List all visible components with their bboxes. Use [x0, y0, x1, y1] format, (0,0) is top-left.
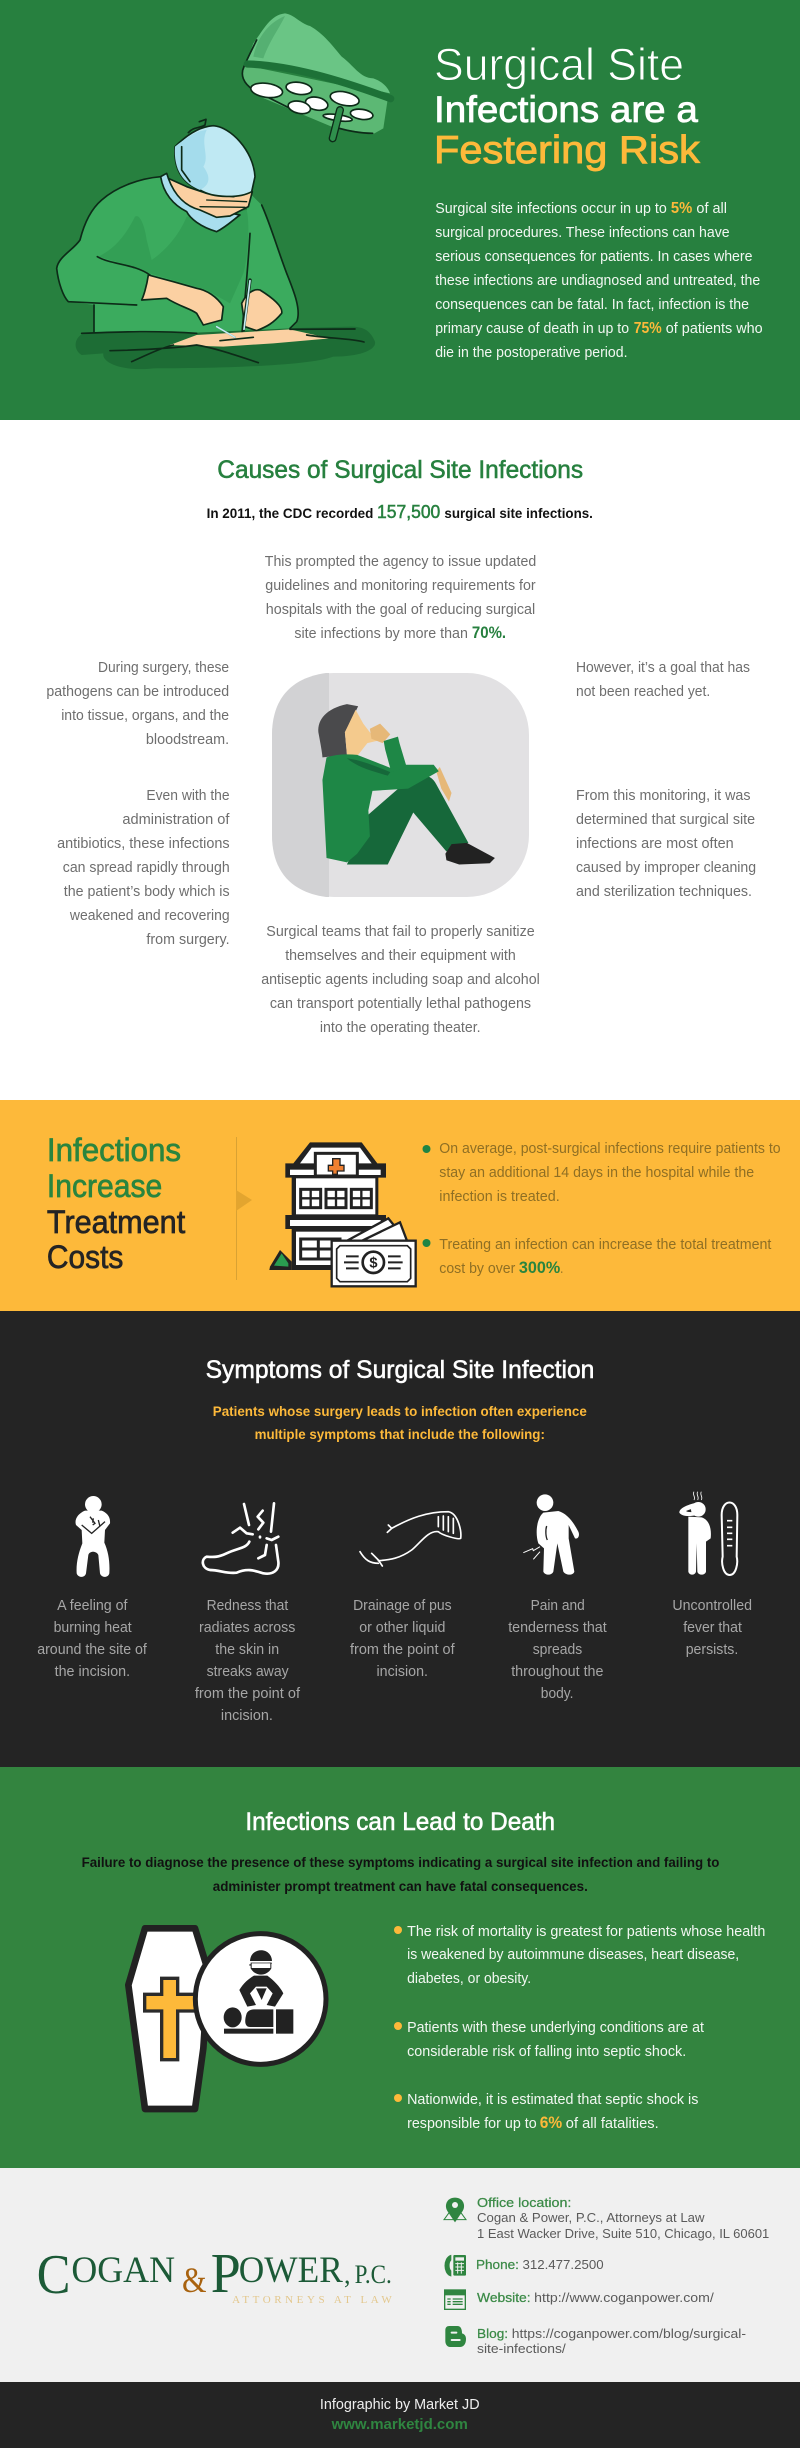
text block: goal not reached: not been reached yet. [576, 684, 710, 700]
contact: phone: Phone: [476, 2257, 519, 2272]
heading: treatment costs: Infections [47, 1132, 181, 1168]
label: pain: throughout the [511, 1664, 604, 1680]
text block: antibiotics: weakened and recovering [69, 908, 230, 924]
illustration: surgeon and operating lamp [57, 13, 391, 369]
label: drainage [350, 1598, 456, 1680]
text block: pathogens introduced: During surgery, these [98, 660, 229, 676]
text block: monitoring findings [576, 788, 756, 900]
text block: CDC guidelines [265, 554, 536, 642]
bullet: fatalities: 6% [540, 2113, 562, 2132]
bullet: risk of mortality [394, 1924, 765, 1987]
statistic: 157,500 infections: 157,500 [377, 502, 440, 522]
text block: goal not reached: However, it’s a goal that has [576, 660, 750, 676]
text block: hero introduction: consequences can be fatal. In fact, infection is the [435, 297, 749, 313]
bullet: risk of mortality: The risk of mortality is greatest for patients whose health [407, 1924, 765, 1940]
contact: phone [445, 2255, 604, 2276]
logo: Cogan & Power: ATTORNEYS AT LAW [232, 2294, 392, 2306]
logo: Cogan & Power [37, 2243, 392, 2306]
text block: hero introduction: of patients who [666, 321, 763, 337]
label: drainage: or other liquid [359, 1620, 445, 1636]
contact: blog: site-infections/ [477, 2341, 566, 2356]
label: fever [672, 1598, 752, 1658]
text block: monitoring findings: infections are most often [576, 836, 734, 852]
contact: blog [445, 2326, 746, 2356]
bullet: hospital stay: infection is treated. [439, 1189, 560, 1205]
text block: surgical teams: antiseptic agents including soap and alcohol [261, 972, 540, 988]
statistic: 157,500 infections [207, 502, 593, 522]
text block: hero introduction: Surgical site infections occur in up to [435, 201, 667, 217]
text block: CDC guidelines: guidelines and monitoring requirements for [265, 578, 536, 594]
label: fever: persists. [686, 1642, 738, 1658]
label: redness: Redness that [207, 1598, 288, 1614]
heading: symptoms: Symptoms of Surgical Site Infection [206, 1356, 594, 1384]
bullet: septic shock risk: considerable risk of falling into septic shock. [407, 2044, 686, 2060]
label: redness: the skin in [215, 1642, 279, 1658]
bullet: septic shock risk [394, 2020, 704, 2060]
icon: hospital and money [269, 1142, 416, 1286]
text block: hero introduction: 75% [634, 320, 662, 337]
bullet: hospital stay: stay an additional 14 days in the hospital while the [439, 1165, 754, 1181]
contact: office location: Office location: [477, 2195, 571, 2210]
text block: pathogens introduced: bloodstream. [146, 732, 229, 748]
bullet: treatment cost: cost by over [439, 1261, 515, 1277]
contact: office location: Cogan & Power, P.C., Attorneys at Law [477, 2210, 705, 2225]
label: pain: body. [541, 1686, 574, 1702]
icon: foot with redness [203, 1503, 278, 1574]
label: pain: tenderness that [508, 1620, 607, 1636]
contact: website: http://www.coganpower.com/ [534, 2290, 714, 2305]
label: redness: radiates across [199, 1620, 295, 1636]
text block: surgical teams: themselves and their equipment with [285, 948, 516, 964]
label: redness: incision. [221, 1708, 273, 1724]
label: drainage: from the point of [350, 1642, 456, 1658]
bullet: treatment cost: 300% [519, 1258, 560, 1277]
illustration: patient sitting against wall [272, 673, 529, 897]
bullet: fatalities: Nationwide, it is estimated that septic shock is [407, 2092, 698, 2108]
bullet: hospital stay [422, 1141, 781, 1205]
arrow: pointer to hospital [236, 1190, 252, 1211]
text block: hero introduction: die in the postoperative period. [435, 345, 628, 361]
text block: surgical teams: Surgical teams that fail to properly sanitize [266, 924, 535, 940]
statistic: 157,500 infections: In 2011, the CDC recorded [207, 505, 373, 521]
bullet: septic shock risk: Patients with these underlying conditions are at [407, 2020, 704, 2036]
text block: antibiotics: the patient’s body which is [64, 884, 230, 900]
contact: office location: 1 East Wacker Drive, Suite 510, Chicago, IL 60601 [477, 2226, 769, 2241]
icon: coffin and CPR [128, 1928, 326, 2109]
label: burning heat: A feeling of [57, 1598, 128, 1614]
panel: death [0, 1767, 800, 2168]
text block: surgical teams [261, 924, 540, 1036]
text block: antibiotics: Even with the [146, 788, 230, 804]
text block: hero introduction: primary cause of death in up to [435, 321, 629, 337]
logo: Cogan & Power: OGAN [71, 2250, 175, 2291]
text block: symptoms introduction: Patients whose surgery leads to infection often experience [213, 1403, 587, 1419]
credit: infographic by: Infographic by Market JD [320, 2396, 480, 2413]
text block: monitoring findings: and sterilization techniques. [576, 884, 752, 900]
logo: Cogan & Power: & [182, 2260, 206, 2300]
label: redness [195, 1598, 301, 1724]
text block: CDC guidelines: site infections by more than [294, 626, 468, 642]
text block: hero introduction: these infections are undiagnosed and untreated, the [435, 273, 760, 289]
panel: causes [0, 420, 800, 1100]
heading: causes: Causes of Surgical Site Infections [217, 456, 583, 484]
contact: blog: Blog: [477, 2326, 508, 2341]
bullet: risk of mortality: is weakened by autoimmune diseases, heart disease, [407, 1947, 739, 1963]
text block: CDC guidelines: This prompted the agency to issue updated [265, 554, 536, 570]
label: pain [508, 1598, 607, 1702]
text block: symptoms introduction: multiple symptoms that include the following: [255, 1426, 545, 1442]
logo: Cogan & Power: , [344, 2260, 350, 2289]
label: burning heat: around the site of [37, 1642, 148, 1658]
contact: office location [444, 2195, 769, 2241]
contact: phone: 312.477.2500 [522, 2257, 604, 2272]
text block: antibiotics: can spread rapidly through [63, 860, 230, 876]
logo: Cogan & Power: P.C. [355, 2260, 392, 2289]
icon: pain figure [523, 1494, 579, 1575]
label: pain: spreads [533, 1642, 582, 1658]
heading: hero title [434, 39, 700, 172]
text block: monitoring findings: caused by improper cleaning [576, 860, 756, 876]
heading: treatment costs: Treatment [47, 1204, 185, 1240]
label: redness: streaks away [207, 1664, 289, 1680]
panel: symptoms [0, 1311, 800, 1767]
heading: hero title: Infections are a [434, 89, 698, 130]
heading: hero title: Festering Risk [434, 129, 700, 172]
text block: pathogens introduced: pathogens can be introduced [46, 684, 229, 700]
bullet: treatment cost: . [560, 1261, 563, 1277]
text block: hero introduction: of all [696, 201, 727, 217]
icon: operating lamp [242, 13, 391, 138]
text block: pathogens introduced: into tissue, organs, and the [61, 708, 229, 724]
text block: hero introduction [435, 200, 763, 361]
icon: draining wound [360, 1512, 461, 1566]
text block: failure to diagnose [82, 1854, 719, 1894]
text block: hero introduction: 5% [671, 200, 692, 217]
heading: death: Infections can Lead to Death [245, 1808, 555, 1836]
contact: website: Website: [477, 2290, 531, 2305]
contact: blog: https://coganpower.com/blog/surgical- [512, 2326, 746, 2341]
text block: CDC guidelines: 70%. [472, 623, 506, 642]
text block: goal not reached [576, 660, 750, 700]
text block: symptoms introduction [213, 1403, 587, 1442]
credit: website: www.marketjd.com [331, 2416, 468, 2433]
heading: treatment costs: Increase [47, 1168, 162, 1204]
text block: antibiotics [57, 788, 230, 948]
text block: pathogens introduced [46, 660, 229, 748]
text block: failure to diagnose: Failure to diagnose the presence of these symptoms indicating a surgical site infection and failing to [82, 1854, 719, 1870]
label: burning heat: burning heat [54, 1620, 132, 1636]
logo: Cogan & Power: C [37, 2244, 70, 2306]
heading: treatment costs: Costs [47, 1239, 123, 1275]
text block: hero introduction: serious consequences for patients. In cases where [435, 249, 752, 265]
panel: contact footer [0, 2168, 800, 2382]
logo: Cogan & Power: OWER [239, 2250, 343, 2291]
icon: fever and thermometer [679, 1492, 737, 1575]
text block: antibiotics: administration of [122, 812, 230, 828]
bullet: treatment cost [422, 1237, 771, 1277]
bullet: hospital stay: On average, post-surgical infections require patients to [439, 1141, 781, 1157]
label: burning heat: the incision. [55, 1664, 130, 1680]
bullet: treatment cost: Treating an infection can increase the total treatment [439, 1237, 771, 1253]
text block: monitoring findings: determined that surgical site [576, 812, 755, 828]
text block: failure to diagnose: administer prompt treatment can have fatal consequences. [213, 1878, 588, 1894]
text block: CDC guidelines: hospitals with the goal of reducing surgical [266, 602, 535, 618]
text block: antibiotics: antibiotics, these infections [57, 836, 230, 852]
bullet: fatalities: responsible for up to [407, 2116, 537, 2132]
statistic: 157,500 infections: surgical site infections. [444, 505, 593, 521]
label: pain: Pain and [531, 1598, 585, 1614]
contact: website [445, 2290, 714, 2309]
logo: Cogan & Power: P [211, 2243, 241, 2305]
text block: surgical teams: can transport potentially lethal pathogens [270, 996, 531, 1012]
bullet: fatalities: of all fatalities. [566, 2116, 659, 2132]
label: drainage: incision. [376, 1664, 428, 1680]
panel: credit bar [0, 2382, 800, 2448]
panel: header [0, 0, 800, 420]
label: fever: fever that [683, 1620, 742, 1636]
icon: hospital and money: $ [369, 1256, 377, 1272]
label: burning heat [37, 1598, 148, 1680]
label: fever: Uncontrolled [672, 1598, 752, 1614]
text block: hero introduction: surgical procedures. These infections can have [435, 225, 730, 241]
panel: treatment costs [0, 1100, 800, 1311]
heading: treatment costs [47, 1132, 185, 1275]
label: redness: from the point of [195, 1686, 301, 1702]
label: drainage: Drainage of pus [353, 1598, 452, 1614]
bullet: fatalities [394, 2092, 698, 2132]
text block: monitoring findings: From this monitoring, it was [576, 788, 750, 804]
text block: surgical teams: into the operating theater. [320, 1020, 481, 1036]
bullet: risk of mortality: diabetes, or obesity. [407, 1971, 531, 1987]
heading: hero title: Surgical Site [434, 39, 684, 90]
icon: surgeon [57, 119, 375, 369]
text block: antibiotics: from surgery. [146, 932, 230, 948]
icon: burning heat figure [76, 1496, 110, 1577]
